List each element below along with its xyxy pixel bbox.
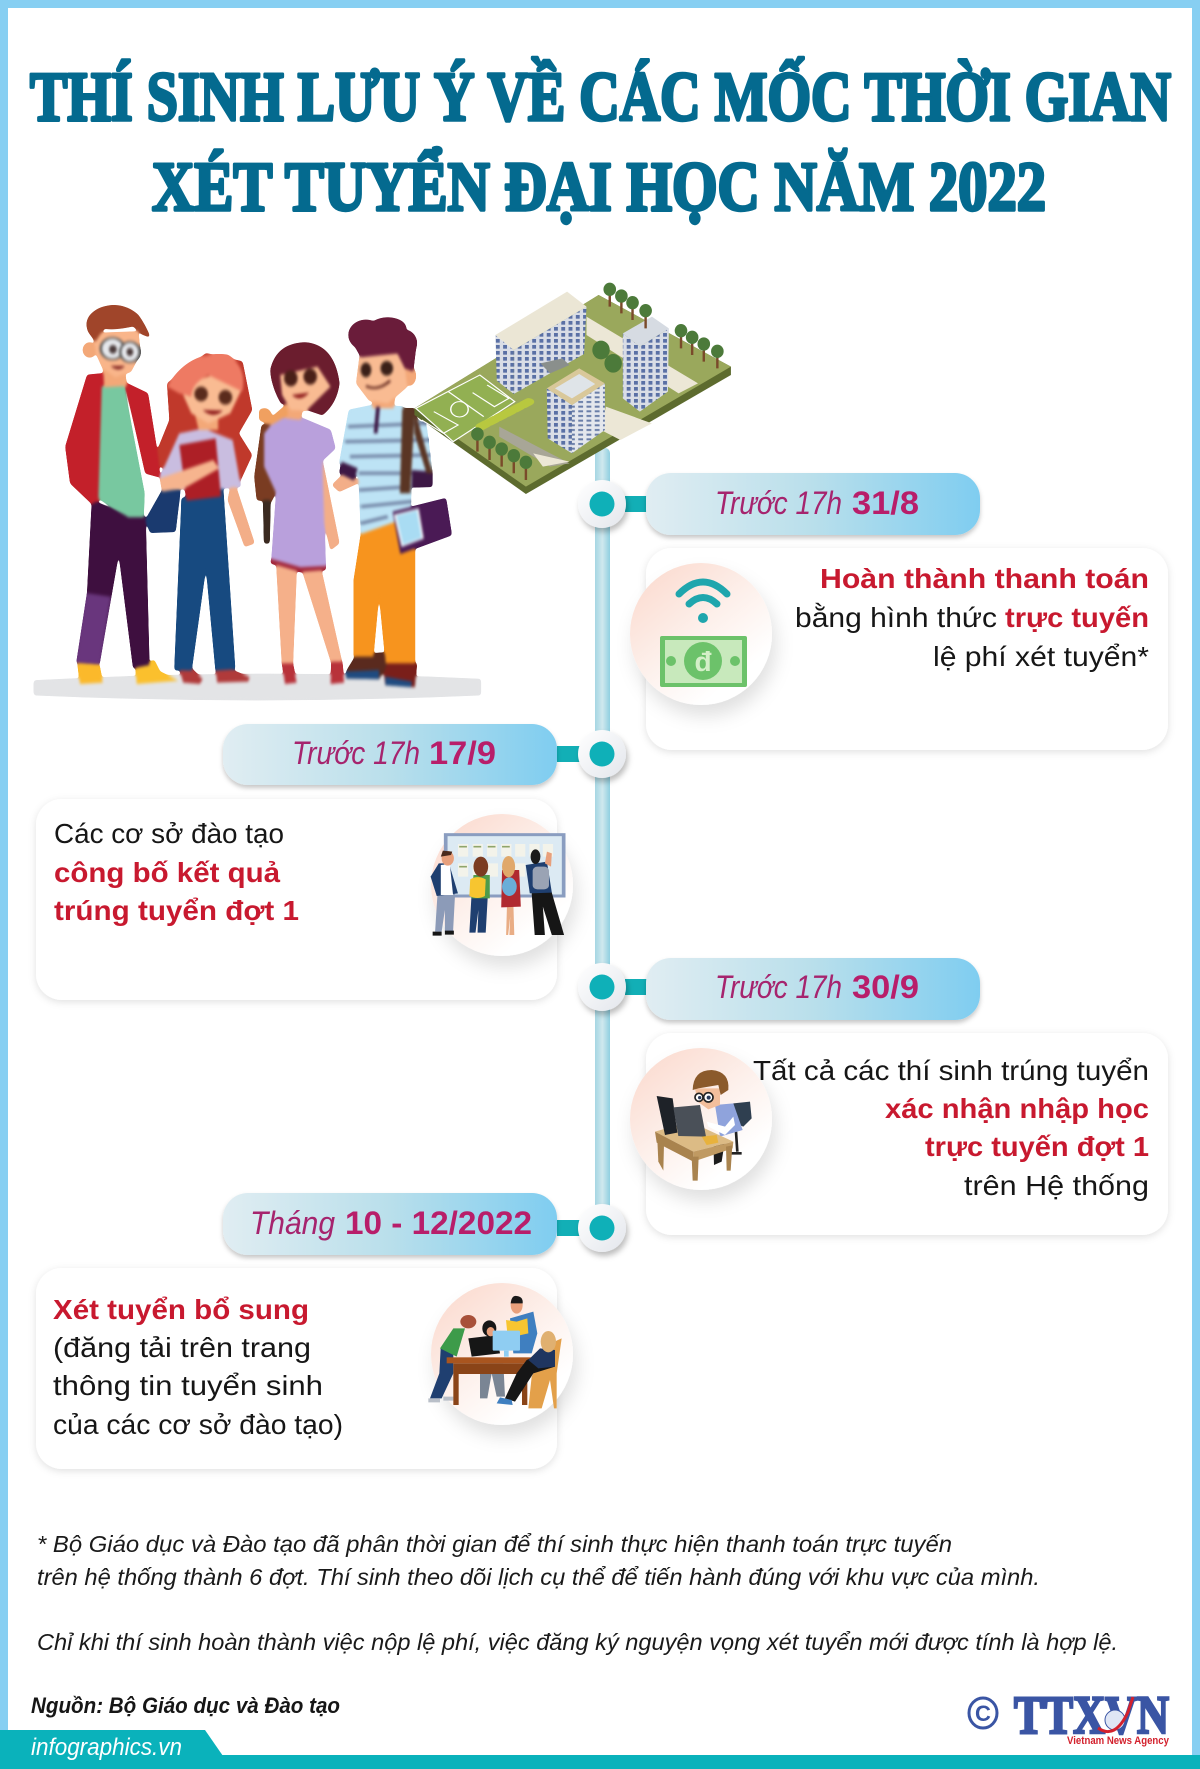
- student 1: boy with glasses: [65, 305, 178, 684]
- logo wordmark: TTXVN: [1014, 1685, 1169, 1745]
- date text: Trước 17h: [292, 735, 420, 771]
- node: [578, 480, 626, 528]
- footnotes: Chỉ khi thí sinh hoàn thành việc nộp lệ phí, việc đăng ký nguyện vọng xét tuyển mới được tính là hợp lệ.: [37, 1629, 1118, 1655]
- card text: Tất cả các thí sinh trúng tuyển: [753, 1055, 1149, 1086]
- icon circle: [431, 814, 573, 956]
- logo tagline: Vietnam News Agency: [1067, 1735, 1170, 1747]
- seated man in black: [468, 1320, 505, 1398]
- node: [578, 1204, 626, 1252]
- title: XÉT TUYỂN ĐẠI HỌC NĂM 2022: [152, 147, 1046, 226]
- student 3: girl in purple dress: [254, 343, 344, 684]
- card text: Các cơ sở đào tạo: [54, 818, 284, 849]
- student 4: boy in striped shirt: [332, 318, 452, 687]
- card text: (đăng tải trên trang: [53, 1332, 311, 1363]
- card text: Hoàn thành thanh toán: [820, 563, 1149, 594]
- footnotes: [37, 1531, 1118, 1655]
- illustration: students: [34, 305, 481, 700]
- person 3: [501, 856, 521, 935]
- date text: Tháng: [250, 1205, 335, 1241]
- person 1: [431, 851, 458, 936]
- ground shadow: [34, 674, 481, 700]
- copyright mark: [969, 1698, 997, 1728]
- walkways: [586, 317, 698, 393]
- card text: bằng hình thức: [795, 602, 997, 633]
- date pill: [646, 473, 980, 535]
- date text: 10 - 12/2022: [345, 1205, 532, 1241]
- TTXVN logo: [969, 1685, 1170, 1747]
- standing man in blue: [506, 1296, 537, 1353]
- date text: 17/9: [429, 735, 496, 771]
- date pill: [223, 724, 557, 785]
- card text: lệ phí xét tuyển*: [933, 641, 1149, 672]
- card text: trên Hệ thống: [964, 1170, 1149, 1201]
- footnotes: * Bộ Giáo dục và Đào tạo đã phân thời gian để thí sinh thực hiện thanh toán trực tuyến: [37, 1531, 952, 1557]
- card text: [753, 1055, 1149, 1201]
- hedge row: [481, 402, 529, 427]
- timeline item 3: [578, 958, 1168, 1235]
- card text: xác nhận nhập học: [885, 1093, 1149, 1124]
- source: Nguồn: Bộ Giáo dục và Đào tạo: [31, 1693, 340, 1718]
- illustration: university campus: [414, 283, 731, 494]
- date text: [250, 1205, 532, 1241]
- date text: Trước 17h: [715, 969, 842, 1005]
- timeline vertical bar: [595, 448, 610, 1228]
- campus base: [414, 295, 731, 494]
- icon: banknote: [660, 636, 747, 687]
- football field: [416, 375, 515, 442]
- connector: [625, 979, 647, 995]
- card text: Xét tuyển bổ sung: [53, 1294, 309, 1325]
- standing woman: [428, 1315, 476, 1402]
- date pill: [646, 958, 980, 1020]
- card: [36, 799, 557, 1000]
- footnotes: trên hệ thống thành 6 đợt. Thí sinh theo dõi lịch cụ thể để tiến hành đúng với khu vực của mình.: [37, 1564, 1040, 1590]
- notice board: [446, 835, 564, 896]
- table: [447, 1357, 535, 1405]
- title: [30, 57, 1171, 226]
- icon circle: [431, 1283, 573, 1425]
- card text: trúng tuyển đợt 1: [54, 895, 299, 926]
- connector: [557, 1220, 581, 1236]
- icon: group at table: [428, 1296, 562, 1408]
- card text: trực tuyến đợt 1: [925, 1131, 1149, 1162]
- date text: 30/9: [852, 969, 919, 1005]
- student 2: girl with red hair: [145, 353, 254, 684]
- footer site name: infographics.vn: [31, 1734, 182, 1761]
- logo globe: [1098, 1697, 1133, 1732]
- card text: công bố kết quả: [54, 857, 280, 888]
- icon: student at computer: [655, 1070, 752, 1181]
- icon circle: [630, 1048, 772, 1190]
- card: [36, 1268, 557, 1469]
- card text: [54, 818, 299, 926]
- copyright mark: C: [975, 1701, 991, 1726]
- person 4: [526, 849, 564, 935]
- card text: [795, 563, 1149, 672]
- node: [578, 963, 626, 1011]
- person 2: [469, 857, 490, 933]
- card: [646, 548, 1168, 750]
- card text: [53, 1294, 343, 1440]
- card text: của các cơ sở đào tạo): [53, 1409, 343, 1440]
- date text: 31/8: [852, 485, 919, 521]
- timeline item 2: [36, 724, 626, 1000]
- node: [578, 730, 626, 778]
- monitor: [493, 1331, 520, 1357]
- icon circle: [630, 563, 772, 705]
- card text: thông tin tuyển sinh: [53, 1370, 323, 1401]
- seated woman with book: [497, 1331, 562, 1408]
- footer bar: [0, 1730, 1200, 1769]
- connector: [557, 746, 581, 762]
- icon: banknote: đ: [694, 646, 712, 677]
- trees: [471, 283, 724, 480]
- icon: wifi: [679, 582, 727, 620]
- timeline item 1: [578, 473, 1168, 750]
- card: [646, 1033, 1168, 1235]
- connector: [625, 496, 647, 512]
- buildings: [495, 292, 669, 453]
- card text: trực tuyến: [1005, 602, 1149, 633]
- date pill: [223, 1193, 557, 1255]
- icon: students at notice board: [431, 835, 564, 936]
- timeline item 4: [36, 1193, 626, 1469]
- date text: Trước 17h: [715, 485, 842, 521]
